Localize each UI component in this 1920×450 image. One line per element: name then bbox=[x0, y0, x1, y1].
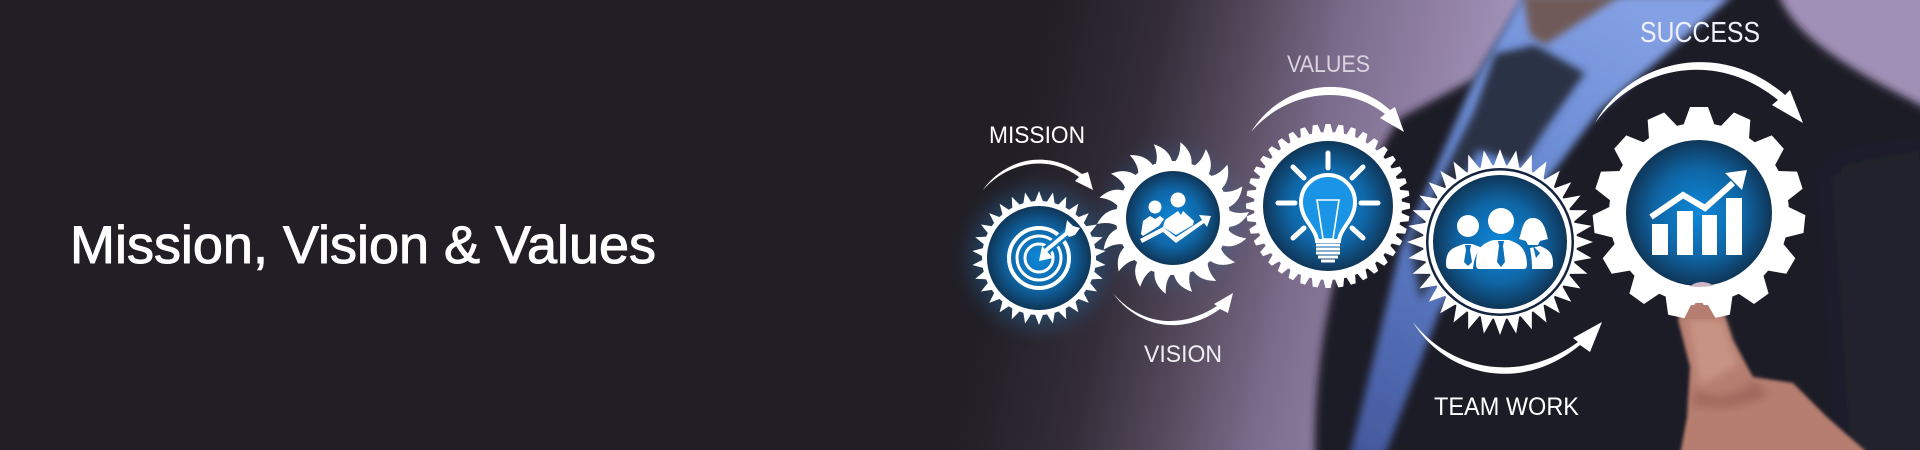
arrow: mission bbox=[983, 160, 1093, 190]
gear 4: team work bbox=[1393, 137, 1601, 347]
tie bbox=[1410, 45, 1585, 300]
arrow: vision bbox=[1113, 293, 1233, 325]
gear 1: mission bbox=[965, 185, 1113, 331]
icon: rising bar chart bbox=[1651, 170, 1747, 255]
arrow: success bbox=[1595, 62, 1803, 123]
gear 3: values bbox=[1233, 111, 1423, 301]
icon: three people bbox=[1446, 208, 1553, 269]
shirt bbox=[1350, 0, 1733, 450]
icon: light bulb bbox=[1278, 153, 1378, 261]
gear 5: success bbox=[1592, 107, 1806, 319]
label: team work: TEAM WORK bbox=[1434, 393, 1579, 421]
arrow: values bbox=[1251, 87, 1404, 132]
label: mission: MISSION bbox=[989, 122, 1085, 149]
icon: target bbox=[1009, 220, 1080, 288]
icon: two people and growth arrow bbox=[1140, 192, 1211, 243]
hand bbox=[1678, 281, 1870, 450]
title: Mission, Vision & Values bbox=[70, 216, 656, 275]
arrow: team work bbox=[1413, 322, 1602, 374]
suit jacket bbox=[1315, 0, 1920, 450]
neck bbox=[1523, 0, 1622, 45]
label: vision: VISION bbox=[1144, 341, 1222, 368]
background: purple gradient wall bbox=[940, 0, 1920, 450]
gear 2: vision bbox=[1066, 117, 1280, 319]
photo: businessman bbox=[1315, 0, 1920, 450]
fingertip bbox=[1690, 282, 1713, 287]
label: success: SUCCESS bbox=[1640, 17, 1760, 49]
label: values: VALUES bbox=[1287, 51, 1370, 78]
finger over gear bbox=[1684, 305, 1716, 319]
